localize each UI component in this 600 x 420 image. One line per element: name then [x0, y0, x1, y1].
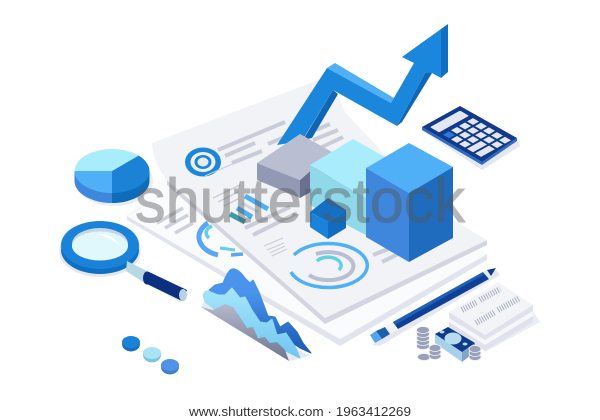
watermark: shutterstock [135, 167, 466, 236]
dots [122, 336, 179, 374]
gray block [257, 134, 332, 198]
document stack [127, 76, 487, 346]
large blue block [366, 143, 453, 262]
growth arrow [277, 24, 448, 145]
small blue cube [310, 198, 346, 239]
footer credit: www.shutterstock.com · 1963412269 [188, 404, 411, 419]
calculator [422, 106, 520, 170]
donut chart on front sheet [291, 244, 367, 288]
text lines on front sheet [264, 238, 400, 262]
paper stack [449, 282, 540, 352]
pie chart [74, 149, 153, 206]
area chart [201, 269, 311, 361]
back blue area [209, 269, 311, 353]
handle [126, 261, 187, 301]
pencil [370, 268, 500, 346]
bottom sheet with donut chart [127, 170, 487, 346]
text lines on upper sheet [205, 122, 343, 176]
front sheet [152, 76, 487, 324]
small bar legend on sheet [213, 185, 297, 235]
coin stacks [416, 326, 481, 360]
target icon [185, 148, 221, 176]
front gray area [201, 304, 289, 361]
magnifying glass [59, 221, 188, 302]
banknote bundle and coins [416, 326, 481, 362]
cyan block [310, 139, 385, 235]
mid cyan area [203, 288, 300, 358]
